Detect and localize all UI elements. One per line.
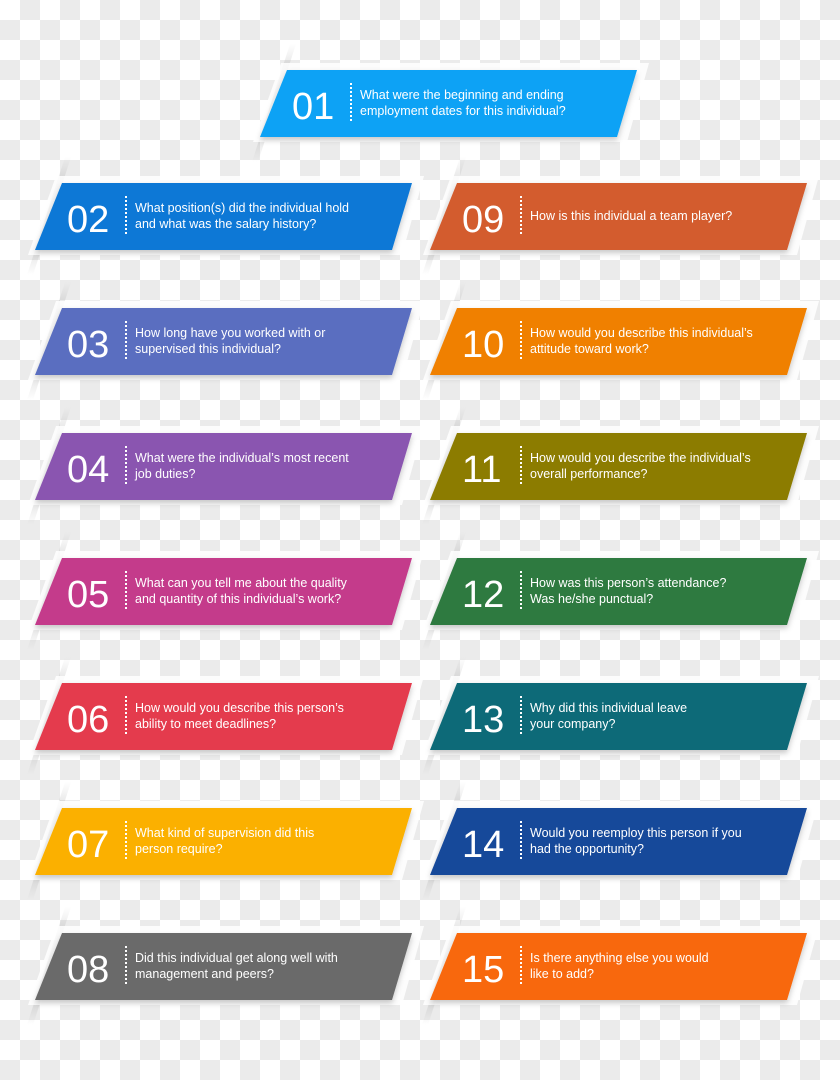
banner 15: like to add? [530,967,594,981]
banner 06: ability to meet deadlines? [135,717,276,731]
banner 12 [422,532,819,650]
banner 01 [252,44,649,162]
banner 14: 14 [462,824,504,866]
banner 03: supervised this individual? [135,342,281,356]
banner 05 [27,532,424,650]
banner 13 [422,657,819,775]
banner 04 [27,407,424,525]
banner 08: Did this individual get along well with [135,951,338,965]
banner 05: 05 [67,574,109,616]
banner 15: Is there anything else you would [530,951,709,965]
banner 09: 09 [462,199,504,241]
banner 03: 03 [67,324,109,366]
banner 08 [27,907,424,1025]
banner 03: How long have you worked with or [135,326,325,340]
banner 11 [422,407,819,525]
banner 05: What can you tell me about the quality [135,576,348,590]
banner 12: How was this person’s attendance? [530,576,726,590]
banner 09 [422,157,819,275]
banner 13: your company? [530,717,616,731]
banner 11: How would you describe the individual’s [530,451,751,465]
banner 13: 13 [462,699,504,741]
banner 15: 15 [462,949,504,991]
banner 04: What were the individual’s most recent [135,451,349,465]
banner 11: 11 [462,449,501,491]
banner 01: What were the beginning and ending [360,88,564,102]
banner 15 [422,907,819,1025]
banner 04: job duties? [134,467,196,481]
banner 08: management and peers? [135,967,274,981]
banner 08: 08 [67,949,109,991]
banner 12: 12 [462,574,504,616]
banner 02: What position(s) did the individual hold [135,201,349,215]
banner 06: 06 [67,699,109,741]
banner 02: and what was the salary history? [135,217,316,231]
banner 01: employment dates for this individual? [360,104,566,118]
banner 06 [27,657,424,775]
banner 14: Would you reemploy this person if you [530,826,742,840]
banner 07: What kind of supervision did this [135,826,314,840]
banner 04: 04 [67,449,109,491]
banner 06: How would you describe this person’s [135,701,344,715]
banner 10 [422,282,819,400]
banner 10: attitude toward work? [530,342,649,356]
banner 02 [27,157,424,275]
banner 03 [27,282,424,400]
banner 07 [27,782,424,900]
banner 09: How is this individual a team player? [530,209,732,223]
banner 11: overall performance? [530,467,647,481]
banner 07: 07 [67,824,109,866]
banner 05: and quantity of this individual’s work? [135,592,341,606]
banner 10: 10 [462,324,504,366]
banner 02: 02 [67,199,109,241]
banner 13: Why did this individual leave [530,701,687,715]
banner 14 [422,782,819,900]
banner 10: How would you describe this individual’s [530,326,753,340]
banner 12: Was he/she punctual? [530,592,653,606]
banner 14: had the opportunity? [530,842,644,856]
banner 07: person require? [135,842,223,856]
banner 01: 01 [292,86,334,128]
